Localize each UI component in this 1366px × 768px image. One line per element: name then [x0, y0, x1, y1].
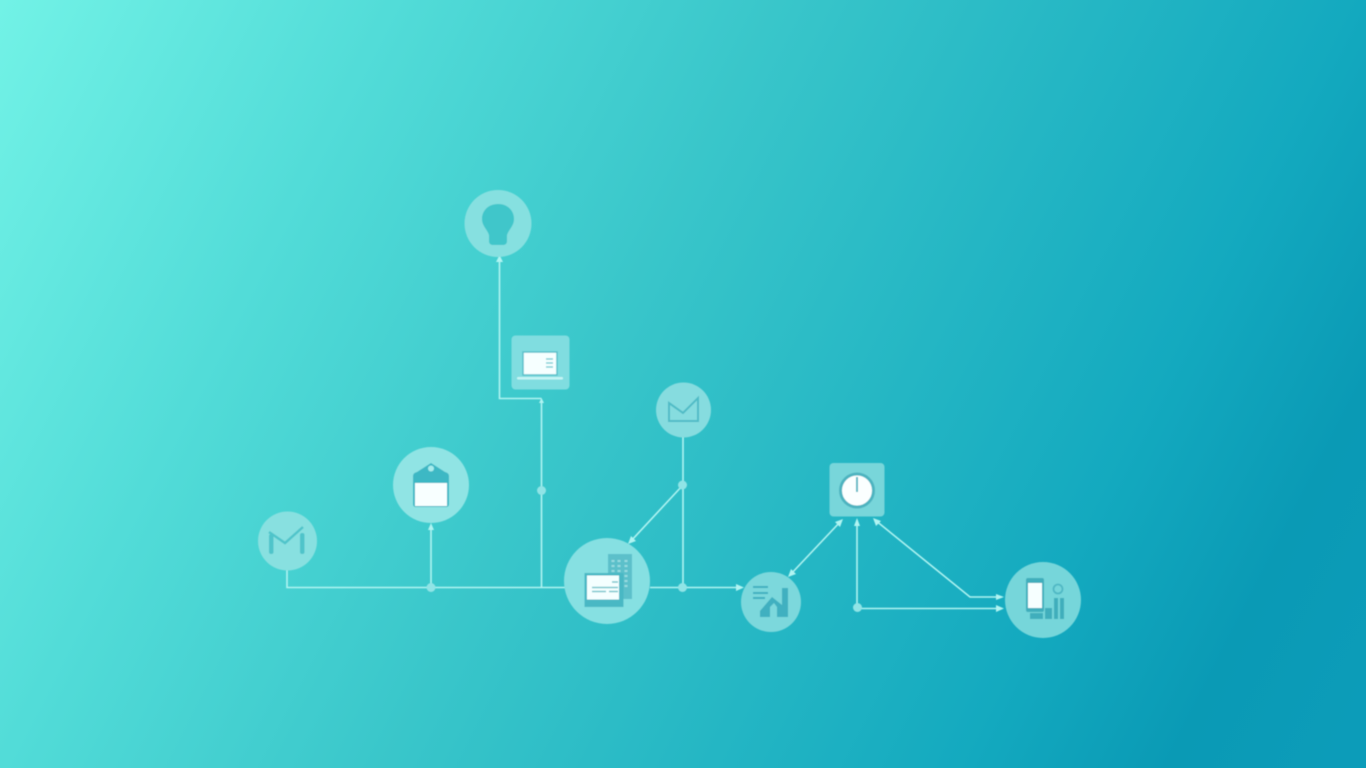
icon: document dashboard circle: [564, 538, 650, 624]
icon: phone and chart circle: [1005, 562, 1081, 638]
network of icons and connectors: [258, 190, 1081, 638]
icon: chart mail circle: [258, 512, 317, 570]
icon: envelope circle: [656, 382, 711, 438]
connector lines: [287, 258, 1002, 608]
icon: laptop tile: [512, 336, 570, 390]
icon: clock tile: [830, 463, 884, 516]
icon: bar and line chart circle: [741, 572, 801, 632]
junction dots: [426, 480, 862, 612]
arrowheads: [428, 255, 1004, 612]
icon: lightbulb circle: [464, 190, 532, 257]
icon: tag card circle: [393, 447, 469, 523]
